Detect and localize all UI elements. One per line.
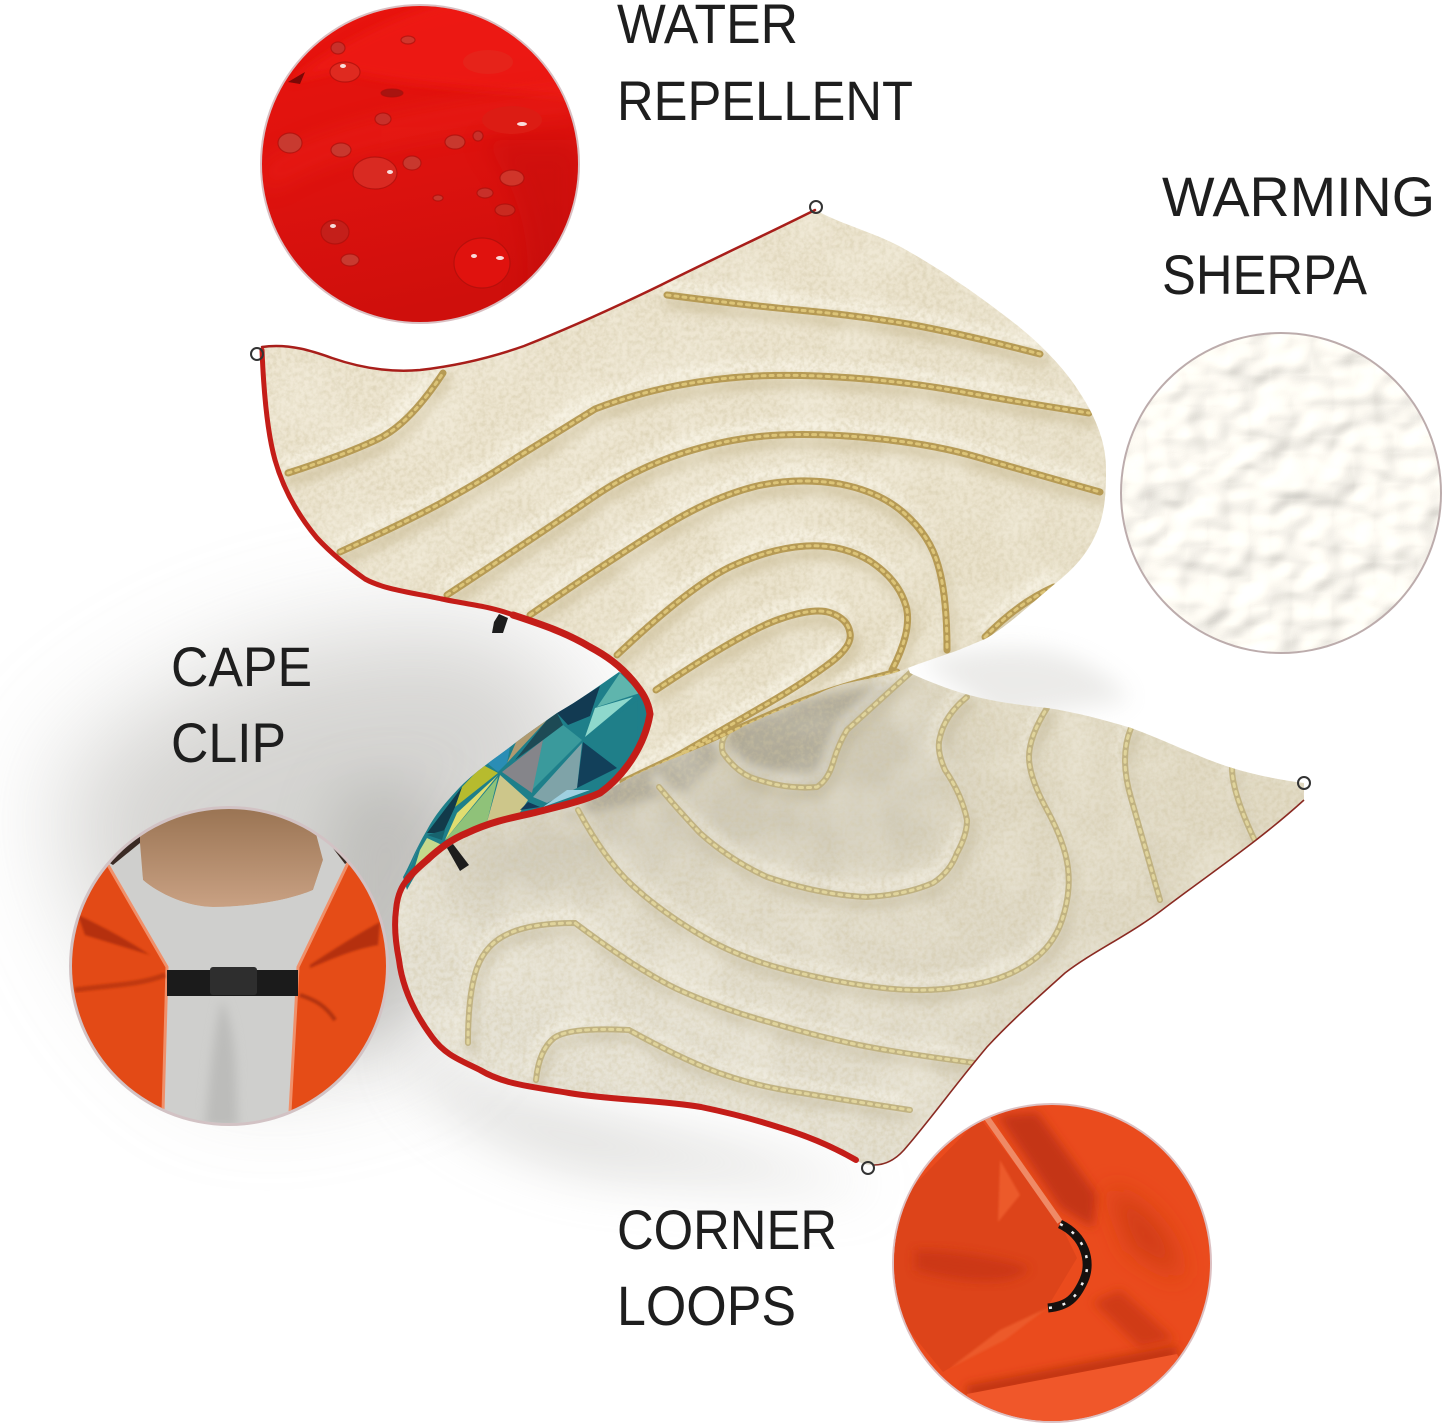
blanket [251, 201, 1315, 1174]
circle: warming sherpa fabric [1120, 332, 1442, 654]
orange left flap [72, 864, 168, 1109]
left flap [880, 1118, 1077, 1372]
folds [997, 1112, 1097, 1228]
label: cape clip: CAPE [171, 635, 312, 698]
buckle [167, 970, 298, 996]
dark corners [110, 836, 140, 865]
background shadow [60, 627, 1130, 1190]
label: corner loops [617, 1198, 837, 1337]
grey t-shirt [140, 844, 323, 907]
label: corner loops: LOOPS [617, 1274, 796, 1337]
inner geometric pattern [403, 672, 646, 890]
zipper pulls [447, 614, 508, 871]
circle: water repellent fabric [258, 0, 582, 326]
orange right flap [288, 862, 386, 1112]
label: corner loops: CORNER [617, 1198, 837, 1261]
label: water repellent [617, 0, 913, 132]
label: warming sherpa [1162, 165, 1435, 306]
upper sherpa sheet [255, 205, 1115, 805]
lower right edge [874, 800, 1304, 1165]
lower sherpa sheet [390, 630, 1315, 1170]
label: cape clip: CLIP [171, 711, 286, 774]
strip binding [987, 1118, 1060, 1222]
neck skin [140, 800, 323, 907]
label: warming sherpa: SHERPA [1162, 243, 1368, 306]
label: warming sherpa: WARMING [1162, 165, 1435, 228]
circle: corner loops photo [880, 1100, 1215, 1427]
water droplets [278, 36, 542, 288]
corner loop rings [251, 201, 1310, 1174]
black cord loop [1048, 1224, 1087, 1308]
red binding [262, 210, 856, 1160]
label: water repellent: REPELLENT [617, 69, 913, 132]
label: cape clip [171, 635, 312, 774]
circle: cape clip photo [60, 800, 400, 1127]
